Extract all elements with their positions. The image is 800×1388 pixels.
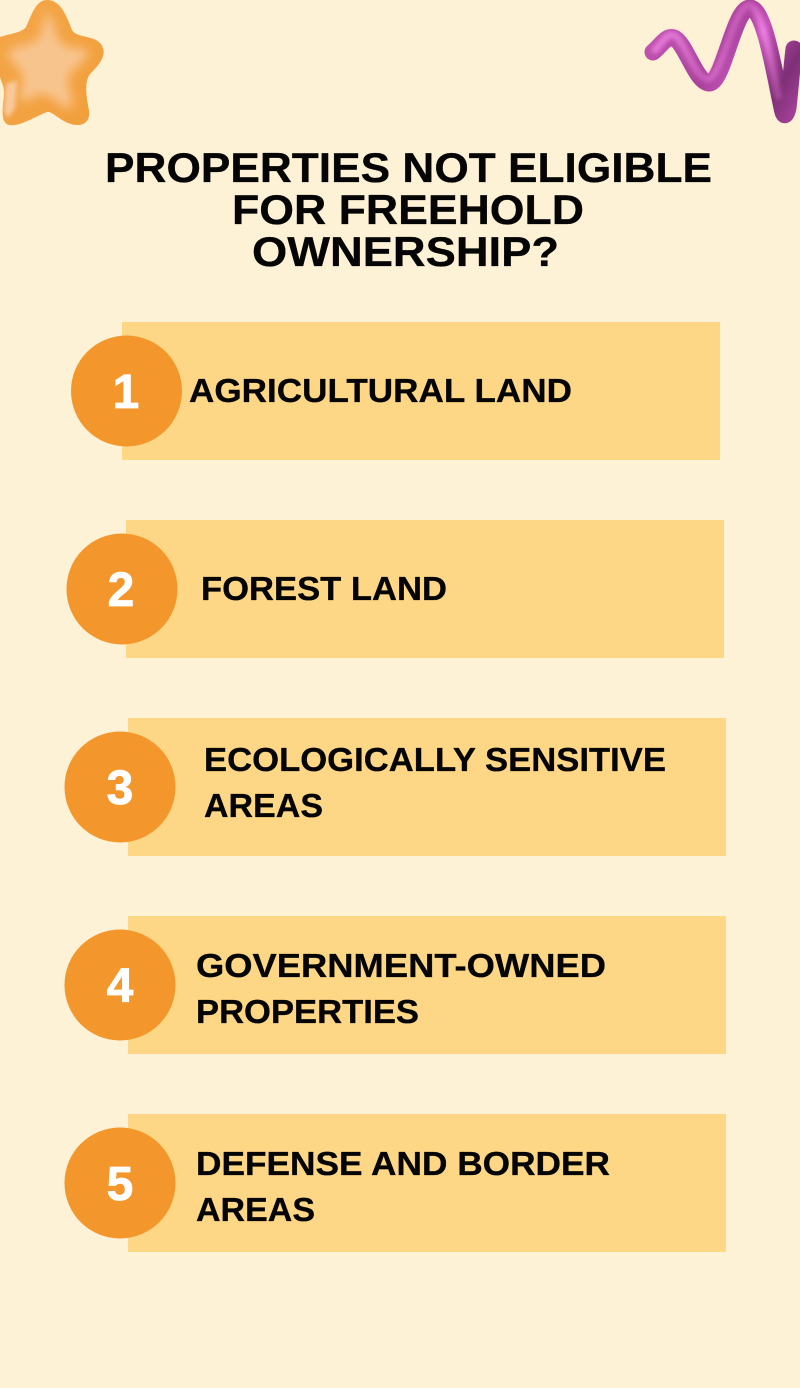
item 3 label [204, 741, 666, 824]
item 1 bar [122, 322, 720, 460]
item 3 label: AREAS [204, 787, 323, 824]
title [105, 144, 712, 275]
item 4 number: 4 [107, 960, 134, 1013]
item 4 bar [128, 916, 726, 1054]
item 3 number: 3 [107, 762, 133, 815]
item 4 label: PROPERTIES [196, 993, 419, 1030]
item 2 bar [126, 520, 724, 658]
panel: item 2 [66, 520, 724, 658]
item 5 label: DEFENSE AND BORDER [196, 1145, 610, 1182]
panel: item 3 [64, 718, 726, 856]
title: PROPERTIES NOT ELIGIBLE [105, 144, 712, 191]
panel: item 5 [64, 1114, 726, 1252]
item 2 label: FOREST LAND [201, 570, 447, 607]
item 2 number badge [66, 534, 178, 644]
item 2 number: 2 [108, 564, 134, 617]
item 1 label: AGRICULTURAL LAND [189, 372, 572, 409]
panel: item 4 [64, 916, 726, 1054]
panel: item 1 [71, 322, 720, 460]
icon: purple 3D squiggle [653, 5, 794, 115]
item 3 bar [128, 718, 726, 856]
item 5 number: 5 [107, 1158, 133, 1211]
item 3 label: ECOLOGICALLY SENSITIVE [204, 741, 666, 778]
item 3 number badge [64, 732, 176, 842]
icon: orange 3D star [0, 0, 104, 125]
item 4 number badge [64, 930, 176, 1040]
item 5 bar [128, 1114, 726, 1252]
item 4 label: GOVERNMENT-OWNED [196, 947, 606, 984]
item 1 number: 1 [113, 366, 139, 419]
item 1 number badge [71, 336, 182, 446]
item 5 label [196, 1145, 610, 1228]
title: FOR FREEHOLD [232, 186, 584, 233]
item 5 label: AREAS [196, 1191, 315, 1228]
title: OWNERSHIP? [252, 228, 559, 275]
item 4 label [196, 947, 606, 1030]
item 5 number badge [64, 1128, 176, 1238]
